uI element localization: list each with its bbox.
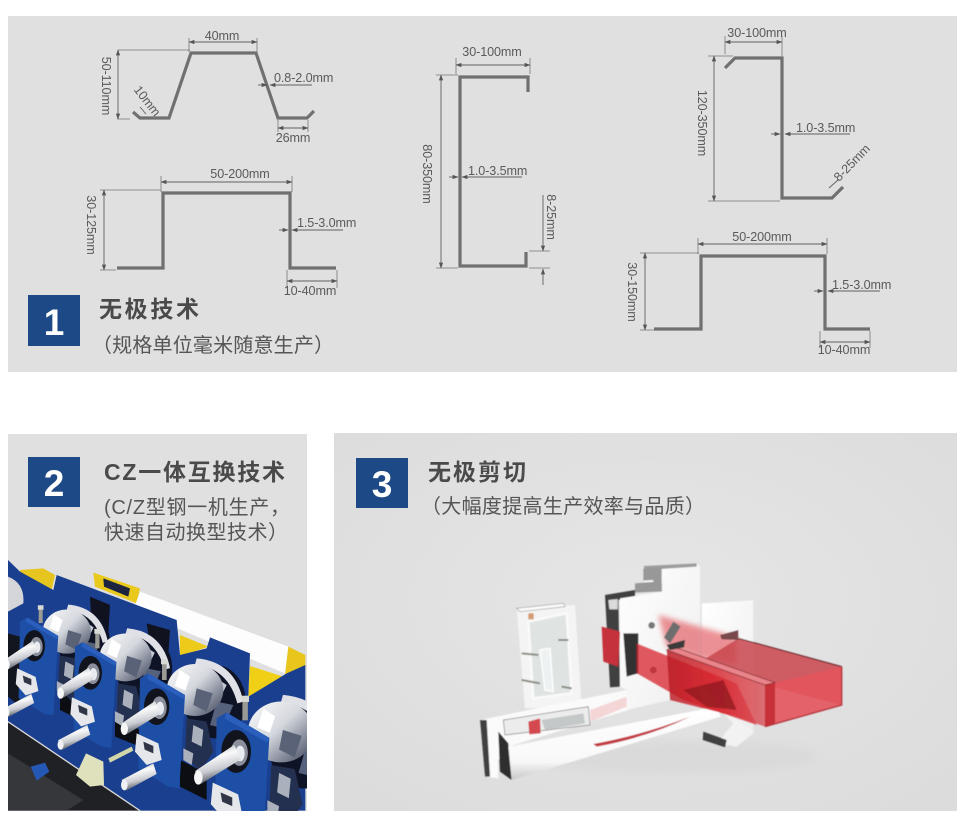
profile: hat section 30-125mm: 30-125mm <box>84 195 98 255</box>
badge: number 3: 3 <box>372 464 392 505</box>
profile: sigma hat section: 26mm <box>276 131 310 145</box>
profile: hat section 30-150mm: 1.5-3.0mm <box>832 278 891 292</box>
illustration: roll forming machine <box>8 560 307 811</box>
profile: sigma hat section: 0.8-2.0mm <box>274 71 333 85</box>
profile: Z section <box>695 26 873 201</box>
subheading: stepless shear: （大幅度提高生产效率与品质） <box>421 495 705 518</box>
profile: C section: 80-350mm <box>420 144 434 204</box>
profile: hat section 30-150mm: 30-150mm <box>625 262 639 322</box>
badge: number 2 <box>28 457 80 507</box>
profile: C section <box>420 45 558 285</box>
profile: C section: 30-100mm <box>462 45 522 59</box>
profile: hat section 30-125mm: 50-200mm <box>210 167 270 181</box>
profile: Z section: 120-350mm <box>695 90 709 156</box>
profile: hat section 30-125mm: 1.5-3.0mm <box>297 216 356 230</box>
subheading: CZ interchange <box>104 496 290 544</box>
profile: hat section 30-125mm: 10-40mm <box>284 284 336 298</box>
panel: stepless shear <box>334 433 957 811</box>
badge: number 1 <box>28 295 80 346</box>
subheading: CZ interchange: (C/Z型钢一机生产， <box>104 496 290 519</box>
profile: Z section: 8-25mm <box>831 142 873 184</box>
heading: stepless shear: 无极剪切 <box>428 459 526 485</box>
profile: C section: 1.0-3.5mm <box>468 164 527 178</box>
profile: hat section 30-150mm <box>625 230 891 357</box>
badge: number 3 <box>356 458 408 508</box>
heading: stepless technology: 无极技术 <box>99 296 199 322</box>
profile: hat section 30-150mm: 50-200mm <box>732 230 792 244</box>
profile: Z section: 1.0-3.5mm <box>796 121 855 135</box>
illustration: shear die with red channel <box>480 563 842 780</box>
profile: C section: 8-25mm <box>544 194 558 240</box>
profile: sigma hat section: 50-110mm <box>99 57 113 115</box>
badge: number 1: 1 <box>44 302 64 343</box>
heading: CZ interchange: CZ一体互换技术 <box>104 459 285 485</box>
subheading: stepless technology: （规格单位毫米随意生产） <box>92 334 334 357</box>
badge: number 2: 2 <box>44 463 64 504</box>
subheading: CZ interchange: 快速自动换型技术） <box>104 521 288 544</box>
profile: hat section 30-125mm <box>84 167 356 298</box>
profile: sigma hat section: 10mm <box>131 83 163 119</box>
panel: stepless technology profiles <box>8 16 957 372</box>
profile: Z section: 30-100mm <box>727 26 787 40</box>
profile: sigma hat section: 40mm <box>205 29 239 43</box>
panel: CZ interchange technology <box>8 434 307 811</box>
profile: sigma hat section <box>99 29 333 145</box>
profile: hat section 30-150mm: 10-40mm <box>818 343 870 357</box>
